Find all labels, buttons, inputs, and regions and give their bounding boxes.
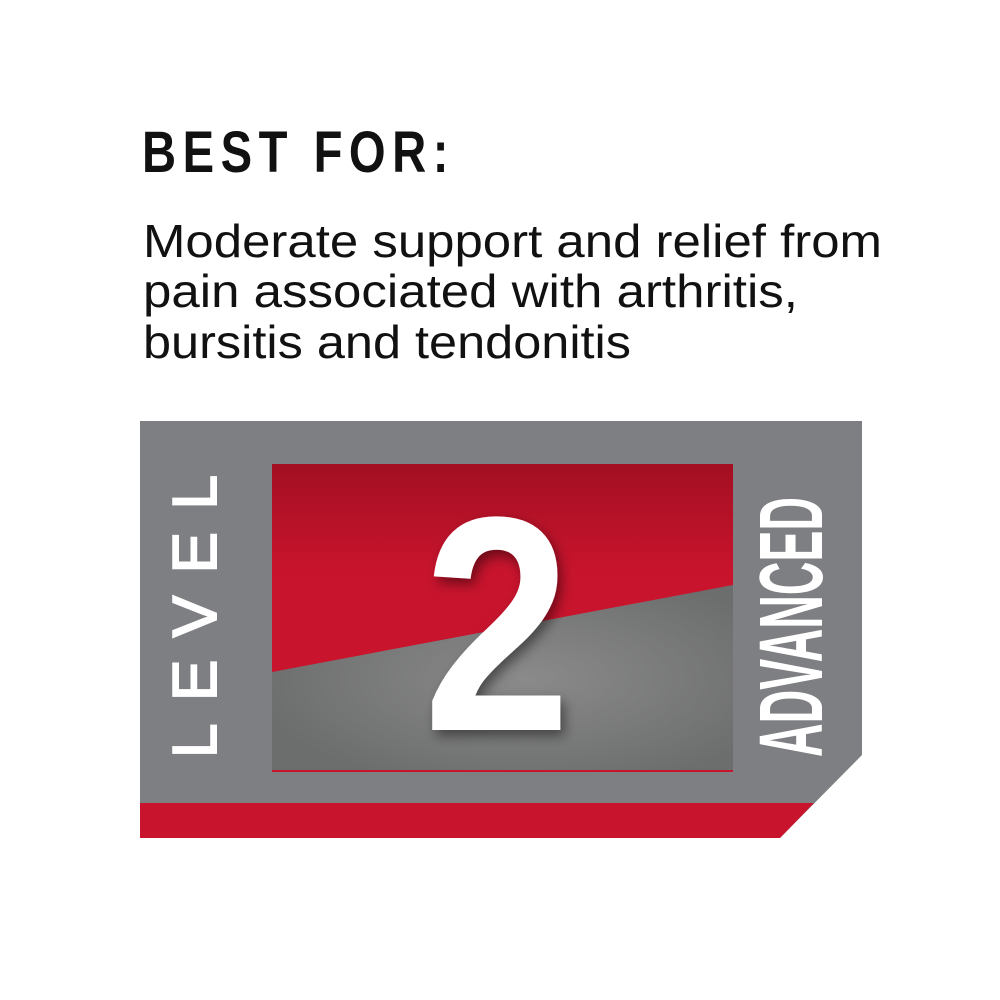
description text: Moderate support and relief from	[143, 215, 882, 267]
inner panel	[272, 464, 733, 772]
title: BEST FOR:	[142, 120, 455, 185]
description text: bursitis and tendonitis	[143, 316, 631, 368]
LEVEL vertical label: LEVEL	[161, 475, 230, 758]
description text	[143, 215, 882, 368]
ADVANCED vertical label: ADVANCED	[742, 497, 842, 757]
red bottom strip	[140, 803, 814, 838]
badge: level 2 advanced	[140, 421, 862, 838]
description text: pain associated with arthritis,	[143, 265, 798, 317]
big number 2: 2	[423, 453, 571, 795]
